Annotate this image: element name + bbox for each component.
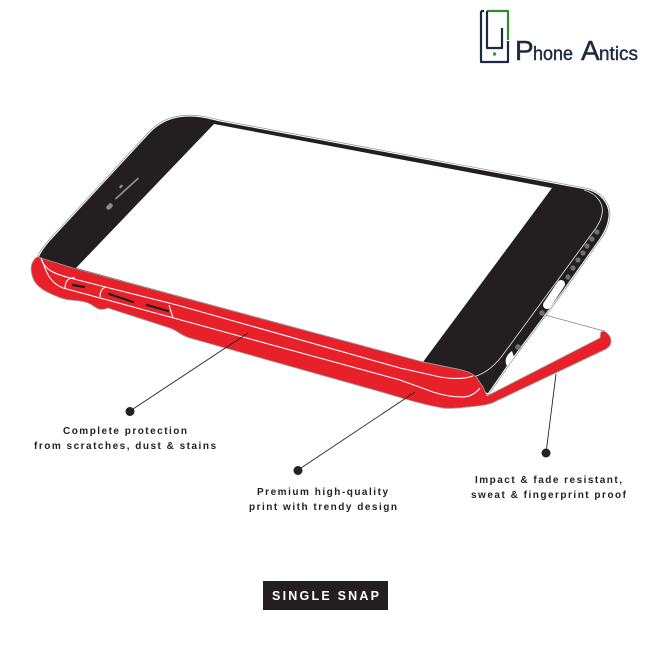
logo wordmark: hone [533,44,573,65]
callout: premium print [249,392,415,513]
badge: single snap [263,581,388,610]
callout: complete protection [34,333,248,452]
body outer outline [38,116,609,394]
leader line [546,374,556,453]
marker dot [126,407,134,416]
logo wordmark: P [515,35,534,66]
phone body [38,116,609,394]
caption: Premium high-quality [257,487,388,498]
caption: Impact & fade resistant, [475,475,622,486]
inner edge highlight [470,190,602,378]
case port slots [73,285,168,311]
badge: single snap: SINGLE SNAP [272,589,379,603]
caption: from scratches, dust & stains [34,441,216,452]
kickstand hairline [545,315,604,331]
earpiece speaker [108,178,138,208]
marker dot [294,466,302,475]
caption: Complete protection [63,426,187,437]
marker dot [542,448,550,458]
charging port [547,284,561,305]
phone illustration [31,116,611,408]
caption: sweat & fingerprint proof [471,490,627,501]
callout: impact and fade resistant [471,374,627,501]
leader line [298,392,415,470]
logo wordmark: ntics [599,44,638,65]
logo: Phone Antics [481,11,638,66]
case seam lines [41,258,480,397]
screen [76,124,552,362]
headphone jack [506,351,514,366]
red case [31,257,611,408]
leader line [130,333,248,411]
logo wordmark: A [581,35,600,66]
logo icon: phone outline [481,11,508,62]
side buttons and grille dots [515,229,600,350]
caption: print with trendy design [249,502,397,513]
